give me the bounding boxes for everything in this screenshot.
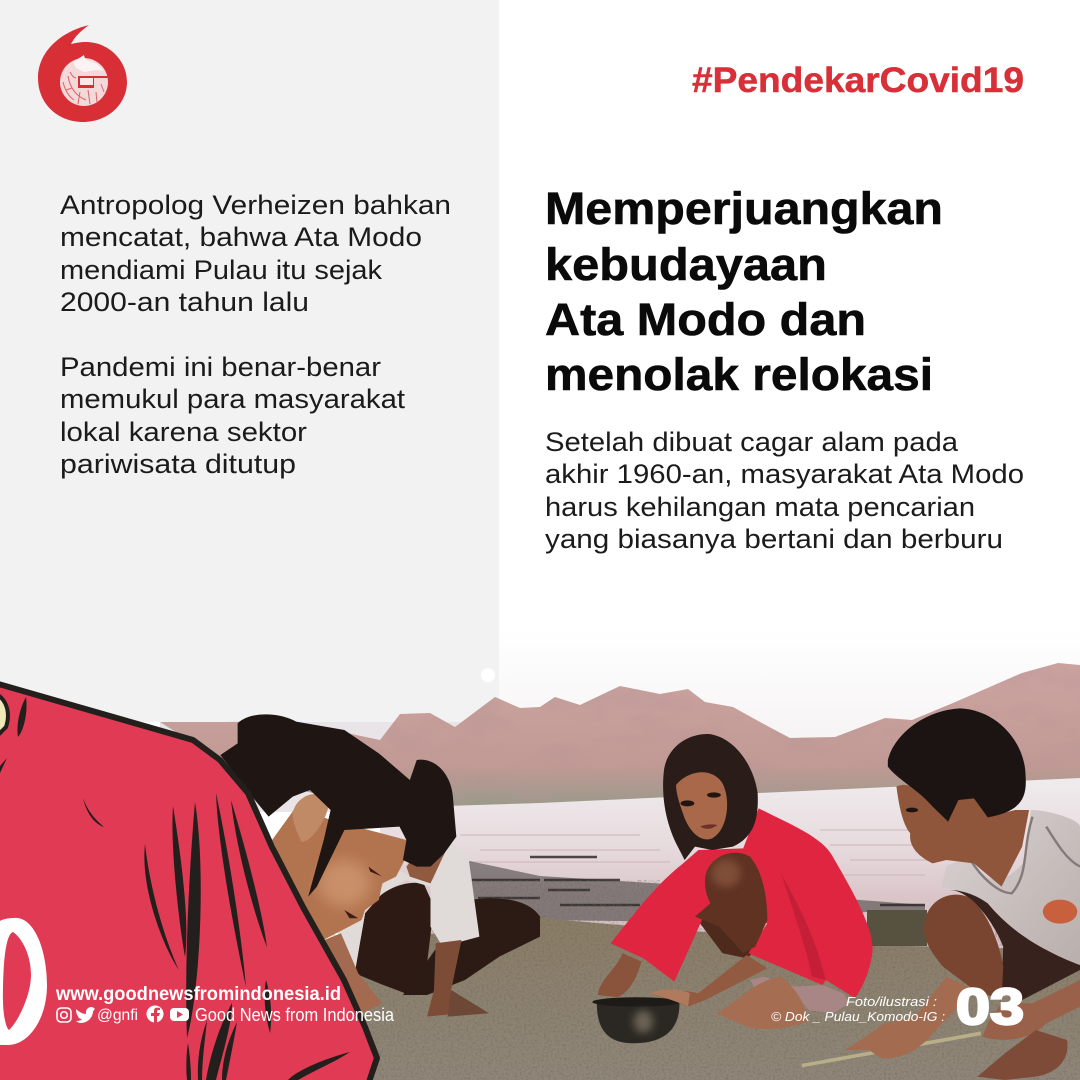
logo G bar [78, 76, 108, 88]
icon: facebook [146, 1006, 164, 1023]
girl one: ear [293, 794, 329, 842]
photo: children on the beach [160, 630, 1080, 1080]
sky haze [499, 630, 1080, 790]
page number: 03 [956, 978, 1024, 1035]
girl: dress shading [781, 873, 826, 980]
paragraph one [60, 190, 451, 317]
girl one: eye and lips [344, 867, 382, 918]
girl: knee highlight [712, 859, 740, 887]
girl: dress [611, 808, 873, 998]
sleeve fold lines [0, 697, 350, 1080]
paragraph one: mencatat, bahwa Ata Modo [60, 222, 422, 252]
sea [380, 778, 1080, 960]
background: left grey panel [0, 0, 499, 722]
girl one: cheek highlight [319, 860, 370, 907]
girl one: face [272, 807, 406, 942]
boy: shorts [950, 890, 1080, 1000]
boy: shirt [941, 810, 1080, 965]
girl one: hair and child two's hair [220, 714, 456, 897]
child two: shirt [338, 840, 479, 973]
logo G inner [80, 78, 93, 85]
right text block: Setelah dibuat cagar alam pada [545, 427, 959, 457]
girl: far arm [598, 953, 642, 997]
right text block: harus kehilangan mata pencarian [545, 492, 975, 522]
left text block [60, 190, 451, 479]
girl: near arm [650, 955, 767, 1007]
boy: lower leg and foot [977, 1030, 1067, 1080]
boy: stick [802, 1033, 981, 1066]
right text block: yang biasanya bertani dan berburu [545, 524, 1003, 554]
paragraph one: mendiami Pulau itu sejak [60, 255, 383, 285]
boy: shirt emblem [1043, 900, 1077, 924]
boy: eye [906, 808, 918, 812]
girl: patterned shorts [750, 977, 850, 1013]
page name: Good News from Indonesia [195, 1005, 395, 1025]
heading: menolak relokasi [545, 349, 933, 400]
heading: Ata Modo dan [545, 294, 866, 345]
sand grain: shore [440, 880, 660, 925]
boy: arm holding stick [845, 977, 974, 1058]
illustration: red sleeve [0, 683, 377, 1080]
right text block: akhir 1960-an, masyarakat Ata Modo [545, 459, 1024, 489]
girl: hand on pot [650, 990, 690, 1007]
heading: Memperjuangkan [545, 183, 943, 234]
sky behind hair [160, 722, 500, 812]
icon: twitter [76, 1007, 95, 1023]
girl one: arm [320, 933, 382, 1013]
paragraph one: 2000-an tahun lalu [60, 287, 309, 317]
logo ornament [63, 72, 104, 104]
logo eagle head [73, 55, 104, 72]
child two: right trouser [403, 898, 540, 995]
photo credit: © Dok _ Pulau_Komodo-IG : [771, 1009, 945, 1024]
logo mark [38, 25, 127, 122]
sleeve cuff [0, 695, 8, 735]
white number shape [0, 918, 47, 1045]
girl: foot [716, 977, 807, 1029]
sand grain: beach [330, 925, 1080, 1080]
heading [545, 183, 943, 400]
boy: thigh [924, 895, 1003, 1000]
logo [38, 25, 127, 122]
footer website: www.goodnewsfromindonesia.id [55, 984, 341, 1005]
child two: face [406, 830, 448, 883]
sand [330, 918, 1080, 1080]
dark shoreline [455, 858, 925, 932]
heading: kebudayaan [545, 239, 827, 290]
paragraph two [60, 352, 406, 479]
child two: arm [427, 940, 461, 1017]
sleeve shape [0, 683, 377, 1080]
girl: features [681, 792, 721, 829]
right text block [545, 427, 1024, 554]
child two: left trouser [355, 883, 434, 995]
footer social row [57, 1005, 395, 1025]
photo credit [771, 994, 945, 1024]
paragraph one: Antropolog Verheizen bahkan [60, 190, 451, 220]
mountains [160, 663, 1080, 810]
sea ripples [460, 830, 940, 875]
photo credit: Foto/ilustrasi : [846, 994, 937, 1009]
concrete slab [867, 910, 927, 946]
icon: instagram [57, 1008, 71, 1022]
paragraph two: pariwisata ditutup [60, 449, 296, 479]
handle: @gnfi [97, 1007, 138, 1024]
boy: shirt stripes [970, 817, 1080, 893]
boy: hair [888, 708, 1026, 822]
paragraph two: Pandemi ini benar-benar [60, 352, 381, 382]
pot [592, 997, 681, 1043]
child two: foot [448, 990, 489, 1017]
paragraph two: lokal karena sektor [60, 417, 307, 447]
mountain texture [380, 663, 1080, 810]
girl: far lower leg [695, 913, 760, 958]
boy and girl in red [592, 708, 1080, 1080]
girl: face [676, 772, 727, 839]
two children on the left [220, 714, 540, 1017]
shore debris [472, 857, 925, 905]
boy: neck and face [896, 785, 1029, 887]
logo inner circle [60, 58, 108, 106]
icon: youtube [170, 1008, 189, 1021]
girl: hair [663, 734, 758, 860]
hashtag: #PendekarCovid19 [692, 61, 1024, 100]
boy: other arm [983, 980, 1080, 1040]
carousel dot [481, 668, 495, 682]
paragraph two: memukul para masyarakat [60, 384, 406, 414]
girl: legs [695, 853, 767, 953]
